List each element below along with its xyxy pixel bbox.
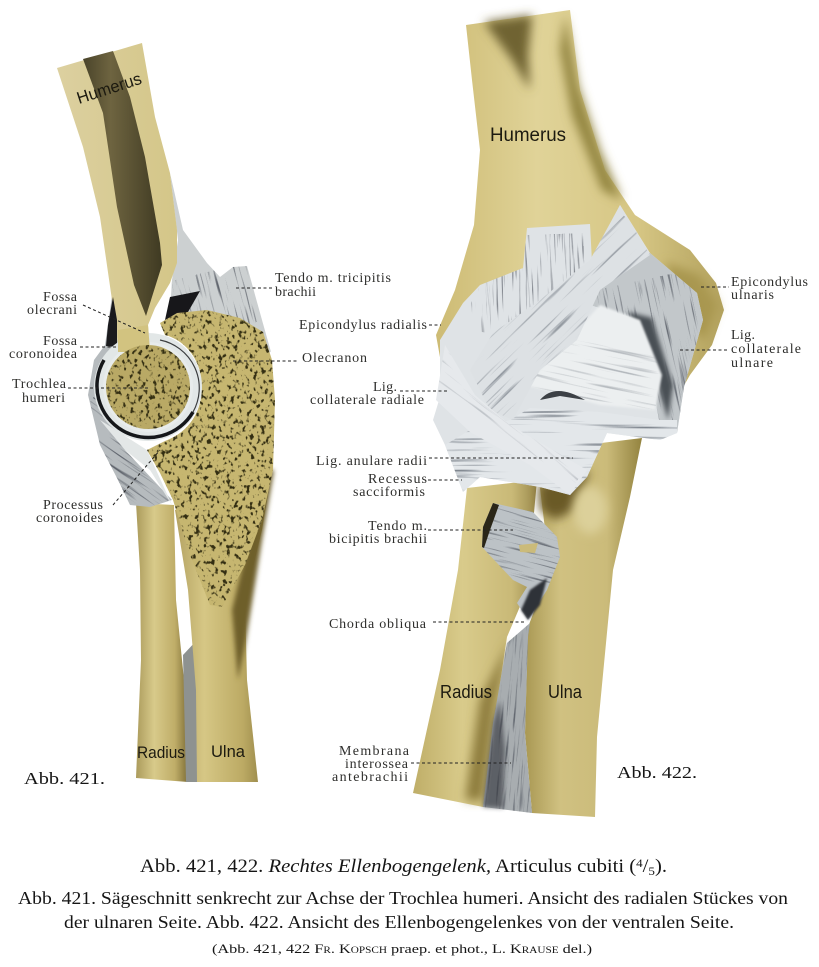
- light boss on ulna: [573, 486, 607, 534]
- label: Fossa olecrani: [27, 290, 145, 333]
- label: Epicondylus ulnaris: Epicondylus: [731, 275, 808, 290]
- label: Lig. collaterale ulnare: Lig.: [731, 328, 755, 343]
- bone label: Humerus, right: Humerus: [490, 125, 566, 146]
- label: Membrana interossea antebrachii: interossea: [345, 757, 409, 772]
- main title: ).: [655, 856, 667, 877]
- radius shaft, left figure: [136, 503, 188, 782]
- label: Recessus sacciformis: [353, 472, 462, 500]
- label: Fossa coronoidea: coronoidea: [9, 347, 78, 362]
- label: Tendo m. bicipitis brachii: [329, 519, 513, 547]
- joint ring: white cartilage and dark cavity: [94, 333, 202, 441]
- main title: /: [643, 856, 649, 877]
- epicondylus ulnaris shading: [665, 262, 718, 340]
- triceps tendon: [170, 174, 271, 352]
- humerus shell, left figure: [57, 43, 177, 365]
- radius shaft, right figure: [413, 480, 537, 807]
- label: Recessus sacciformis: Recessus: [368, 472, 427, 487]
- label: Tendo m. tricipitis brachii: brachii: [275, 285, 316, 300]
- label: Lig. collaterale ulnare: collaterale: [731, 342, 801, 357]
- label: Tendo m. tricipitis brachii: [236, 271, 391, 300]
- bone label: Ulna, left: Ulna: [211, 742, 246, 761]
- label: Recessus sacciformis: sacciformis: [353, 485, 425, 500]
- caption: Abb. 422: Abb. 422.: [617, 763, 697, 782]
- label: Processus coronoides: coronoides: [36, 511, 103, 526]
- membrana interossea: [480, 623, 532, 813]
- ulna shaft, left figure: [175, 470, 272, 782]
- credit line: (Abb. 421, 422 Fr. Kopsch praep. et phot., L. Krause del.): [212, 941, 592, 956]
- label: Lig. collaterale radiale: collaterale radiale: [310, 393, 424, 408]
- label: Tendo m. bicipitis brachii: bicipitis brachii: [329, 532, 427, 547]
- label: Trochlea humeri: [12, 377, 150, 406]
- label: Processus coronoides: [36, 450, 160, 526]
- label: Olecranon: Olecranon: [302, 351, 367, 366]
- humerus, right figure: [436, 10, 724, 430]
- white joint wedge below trochlea: [100, 420, 172, 505]
- medullary cavity: [83, 51, 162, 316]
- main title: Abb. 421, 422. Rechtes Ellenbogengelenk, Articulus cubiti (: [140, 856, 625, 877]
- label: Trochlea humeri: Trochlea: [12, 377, 67, 392]
- label: Membrana interossea antebrachii: Membrana: [339, 744, 410, 759]
- label: Epicondylus radialis: Epicondylus radialis: [299, 318, 427, 333]
- label: Fossa coronoidea: [9, 334, 117, 362]
- label: Lig. collaterale ulnare: ulnare: [731, 356, 773, 371]
- figure: Abb. 421 sagittal section: [46, 43, 276, 782]
- radius shading beside membrane: [465, 640, 510, 800]
- caption: Abb. 421: Abb. 421.: [24, 769, 105, 788]
- shaded ridge on humeral right: [560, 15, 622, 200]
- dark shaded band on humerus: [484, 15, 532, 90]
- fossa coronoidea dark gap: [106, 297, 117, 347]
- annular ligament band: [446, 410, 677, 495]
- label: Fossa coronoidea: Fossa: [43, 334, 78, 349]
- description line one: Abb. 421. Sägeschnitt senkrecht zur Achse der Trochlea humeri. Ansicht des radialen Stückes von: [18, 888, 788, 908]
- caption block: [18, 856, 788, 956]
- bone label: Ulna, right: Ulna: [548, 682, 583, 702]
- ulna cancellous section: [147, 310, 275, 607]
- oblique ligament band: [477, 205, 650, 416]
- label: Fossa olecrani: Fossa: [43, 290, 78, 305]
- humeral neck above trochlea: [118, 325, 158, 352]
- bone label: Radius, left: Radius: [137, 743, 185, 762]
- label: Fossa olecrani: olecrani: [27, 303, 77, 318]
- label: Epicondylus ulnaris: ulnaris: [731, 288, 774, 303]
- ulnar fan, grey shading: [592, 253, 703, 432]
- ligament mass: [433, 205, 703, 495]
- label: Lig. collaterale ulnare: [680, 328, 801, 371]
- label: Lig. collaterale radiale: Lig.: [373, 380, 397, 395]
- label: Olecranon: [233, 351, 367, 366]
- main title: 4: [636, 856, 643, 870]
- cross band lower left: [436, 360, 583, 495]
- label: Tendo m. bicipitis brachii: Tendo m.: [368, 519, 427, 534]
- biceps tendon: [482, 503, 560, 621]
- annotations: Abb. 421 labels: [9, 271, 391, 788]
- annotations: Abb. 422 labels: [299, 275, 808, 785]
- label: Membrana interossea antebrachii: antebrachii: [332, 770, 408, 785]
- dark shaded side of ulna: [232, 470, 274, 680]
- bone label: Humerus, left: Humerus: [74, 69, 144, 108]
- ligament capsule, left figure: [88, 298, 172, 507]
- label: Chorda obliqua: Chorda obliqua: [329, 617, 427, 632]
- trochlea cancellous bone: [106, 345, 190, 429]
- dark shadow along capsule edge: [628, 312, 673, 420]
- label: Tendo m. tricipitis brachii: Tendo m. tricipitis: [275, 271, 391, 286]
- interosseous membrane, left figure: [183, 640, 199, 782]
- ligament opening slit: [540, 391, 585, 400]
- label: Trochlea humeri: humeri: [22, 391, 65, 406]
- fan fibres above ligament: [471, 233, 584, 332]
- figure: Abb. 422 ventral view: [413, 10, 724, 822]
- label: Membrana interossea antebrachii: [332, 744, 511, 785]
- label: Lig. anulare radii: Lig. anulare radii: [316, 454, 427, 469]
- bone label: Radius, right: Radius: [440, 682, 492, 702]
- ulna shaft, right figure: [525, 438, 642, 817]
- dark shadow under ligaments on ulna: [538, 470, 590, 520]
- label: Lig. collaterale radiale: [310, 380, 448, 408]
- description line two: der ulnaren Seite. Abb. 422. Ansicht des Ellenbogengelenkes von der ventralen Seite.: [64, 912, 734, 932]
- label: Processus coronoides: Processus: [43, 498, 103, 513]
- label: Epicondylus ulnaris: [701, 275, 808, 303]
- black slit in fossa olecrani: [165, 291, 200, 320]
- white capsule: [532, 304, 664, 409]
- main title: 5: [648, 864, 655, 878]
